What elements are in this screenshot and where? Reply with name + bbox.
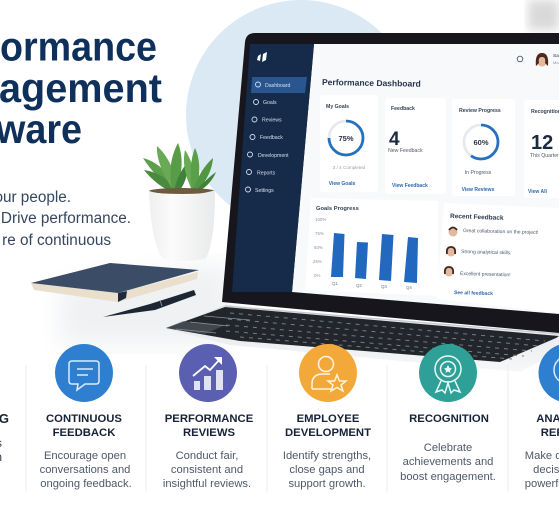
panel: recent feedback: Strong analytical skills. xyxy=(461,249,512,256)
icon: award ribbon xyxy=(419,344,477,402)
feature: employee development: close gaps and xyxy=(289,464,365,476)
card: review progress xyxy=(452,99,515,196)
panel: recent feedback xyxy=(437,203,559,313)
card: recognition: This Quarter xyxy=(530,153,559,159)
chart: goals progress: 75% xyxy=(315,231,324,236)
sidebar: Reviews xyxy=(262,118,282,124)
card: feedback: 4 xyxy=(389,129,400,150)
card: my goals xyxy=(320,95,378,192)
feature: performance reviews: insightful reviews. xyxy=(163,478,251,490)
icon: speech bubble xyxy=(55,344,113,402)
feature: performance reviews xyxy=(163,344,254,490)
feature: continuous feedback: Encourage open xyxy=(44,450,126,462)
chart: goals progress xyxy=(305,198,438,296)
card: review progress: 60% xyxy=(473,138,489,147)
card: recognition xyxy=(524,100,559,198)
panel: recent feedback: Great collaboration on the project! xyxy=(463,228,538,236)
chart: goals progress: 50% xyxy=(314,245,323,250)
feature: employee development: DEVELOPMENT xyxy=(285,427,371,439)
feature: recognition xyxy=(400,344,496,483)
laptop base and keyboard xyxy=(166,305,559,372)
feature: employee development xyxy=(283,344,371,490)
chart: goals progress: Goals Progress xyxy=(316,206,359,212)
chart: goals progress: Q1 xyxy=(332,281,338,286)
screen header: Ma xyxy=(553,60,559,65)
panel: recent feedback: Excellent presentation! xyxy=(460,271,511,278)
card: review progress: View Reviews xyxy=(462,187,495,193)
column dividers xyxy=(26,365,508,492)
title: agement xyxy=(0,65,162,111)
feature: continuous feedback: CONTINUOUS xyxy=(46,413,122,425)
feature: performance reviews: REVIEWS xyxy=(183,427,236,439)
feature: performance reviews: consistent and xyxy=(171,464,243,476)
card: review progress: In Progress xyxy=(465,170,492,176)
light blue circle backdrop xyxy=(186,0,416,230)
card: feedback: New Feedback xyxy=(388,148,423,154)
screen content area xyxy=(292,44,559,314)
icon: pen xyxy=(103,290,196,317)
sidebar: Dashboard xyxy=(265,83,290,89)
chart: goals progress: 0% xyxy=(314,273,320,278)
hinge highlight xyxy=(225,306,559,334)
card: review progress: Review Progress xyxy=(459,108,501,114)
sidebar: Settings xyxy=(255,188,274,194)
feature: performance reviews: Conduct fair, xyxy=(176,450,238,462)
screen header: Sa xyxy=(553,53,559,59)
feature: recognition: boost engagement. xyxy=(400,471,496,483)
intro text xyxy=(0,189,131,249)
chart: goals progress: Q2 xyxy=(356,283,362,288)
feature: continuous feedback xyxy=(40,344,132,490)
chart: goals progress: Q3 xyxy=(381,284,387,289)
feature: recognition: RECOGNITION xyxy=(409,413,489,425)
card: my goals: 3 / 4 Completed xyxy=(333,165,366,170)
card: recognition: View All xyxy=(528,189,548,195)
table surface xyxy=(60,262,230,345)
sidebar xyxy=(232,44,314,292)
feature: performance reviews: PERFORMANCE xyxy=(165,413,254,425)
feature: continuous feedback: conversations and xyxy=(40,464,130,476)
chart: goals progress: Q4 xyxy=(406,285,412,290)
title xyxy=(0,24,162,152)
active menu item xyxy=(251,77,307,93)
corner shading xyxy=(528,0,559,30)
icon: person with star xyxy=(299,344,357,402)
feature: analytics and reports, clipped xyxy=(525,344,559,490)
screen header xyxy=(517,53,559,66)
panel: recent feedback: Recent Feedback xyxy=(450,213,504,222)
feature: continuous feedback: ongoing feedback. xyxy=(40,478,132,490)
feature: employee development: support growth. xyxy=(288,478,366,490)
laptop lid xyxy=(222,33,559,333)
card: feedback xyxy=(385,98,446,194)
card: recognition: 12 xyxy=(531,132,553,154)
sidebar: Goals xyxy=(263,100,277,106)
sidebar: Feedback xyxy=(260,135,283,141)
feature: recognition: achievements and xyxy=(403,456,493,468)
logo xyxy=(257,52,267,62)
panel: recent feedback: See all feedback xyxy=(454,290,493,297)
feature: continuous feedback: FEEDBACK xyxy=(53,427,116,439)
sidebar: Reports xyxy=(257,170,276,176)
card: my goals: View Goals xyxy=(329,181,356,187)
intro text: re of continuous xyxy=(2,232,111,249)
icon: notebook xyxy=(31,263,199,302)
icon: analytics xyxy=(538,344,559,402)
card: my goals: 75% xyxy=(338,134,354,143)
feature: employee development: Identify strengths, xyxy=(283,450,371,462)
chart: goals progress: 100% xyxy=(315,217,326,222)
intro text: Drive performance. xyxy=(1,210,131,227)
chart: goals progress: 25% xyxy=(313,259,322,264)
dashboard heading: Performance Dashboard xyxy=(322,77,421,89)
icon: growth chart xyxy=(179,344,237,402)
title: ormance xyxy=(0,24,157,70)
laptop xyxy=(166,33,559,372)
feature: recognition: Celebrate xyxy=(424,442,472,454)
icon: potted plant xyxy=(143,143,216,261)
card: feedback: Feedback xyxy=(391,106,415,112)
sidebar: Development xyxy=(258,153,289,159)
card: feedback: View Feedback xyxy=(392,183,428,189)
feature: employee development: EMPLOYEE xyxy=(297,413,360,425)
card: my goals: My Goals xyxy=(326,104,349,110)
feature: goal setting, clipped xyxy=(0,411,9,464)
